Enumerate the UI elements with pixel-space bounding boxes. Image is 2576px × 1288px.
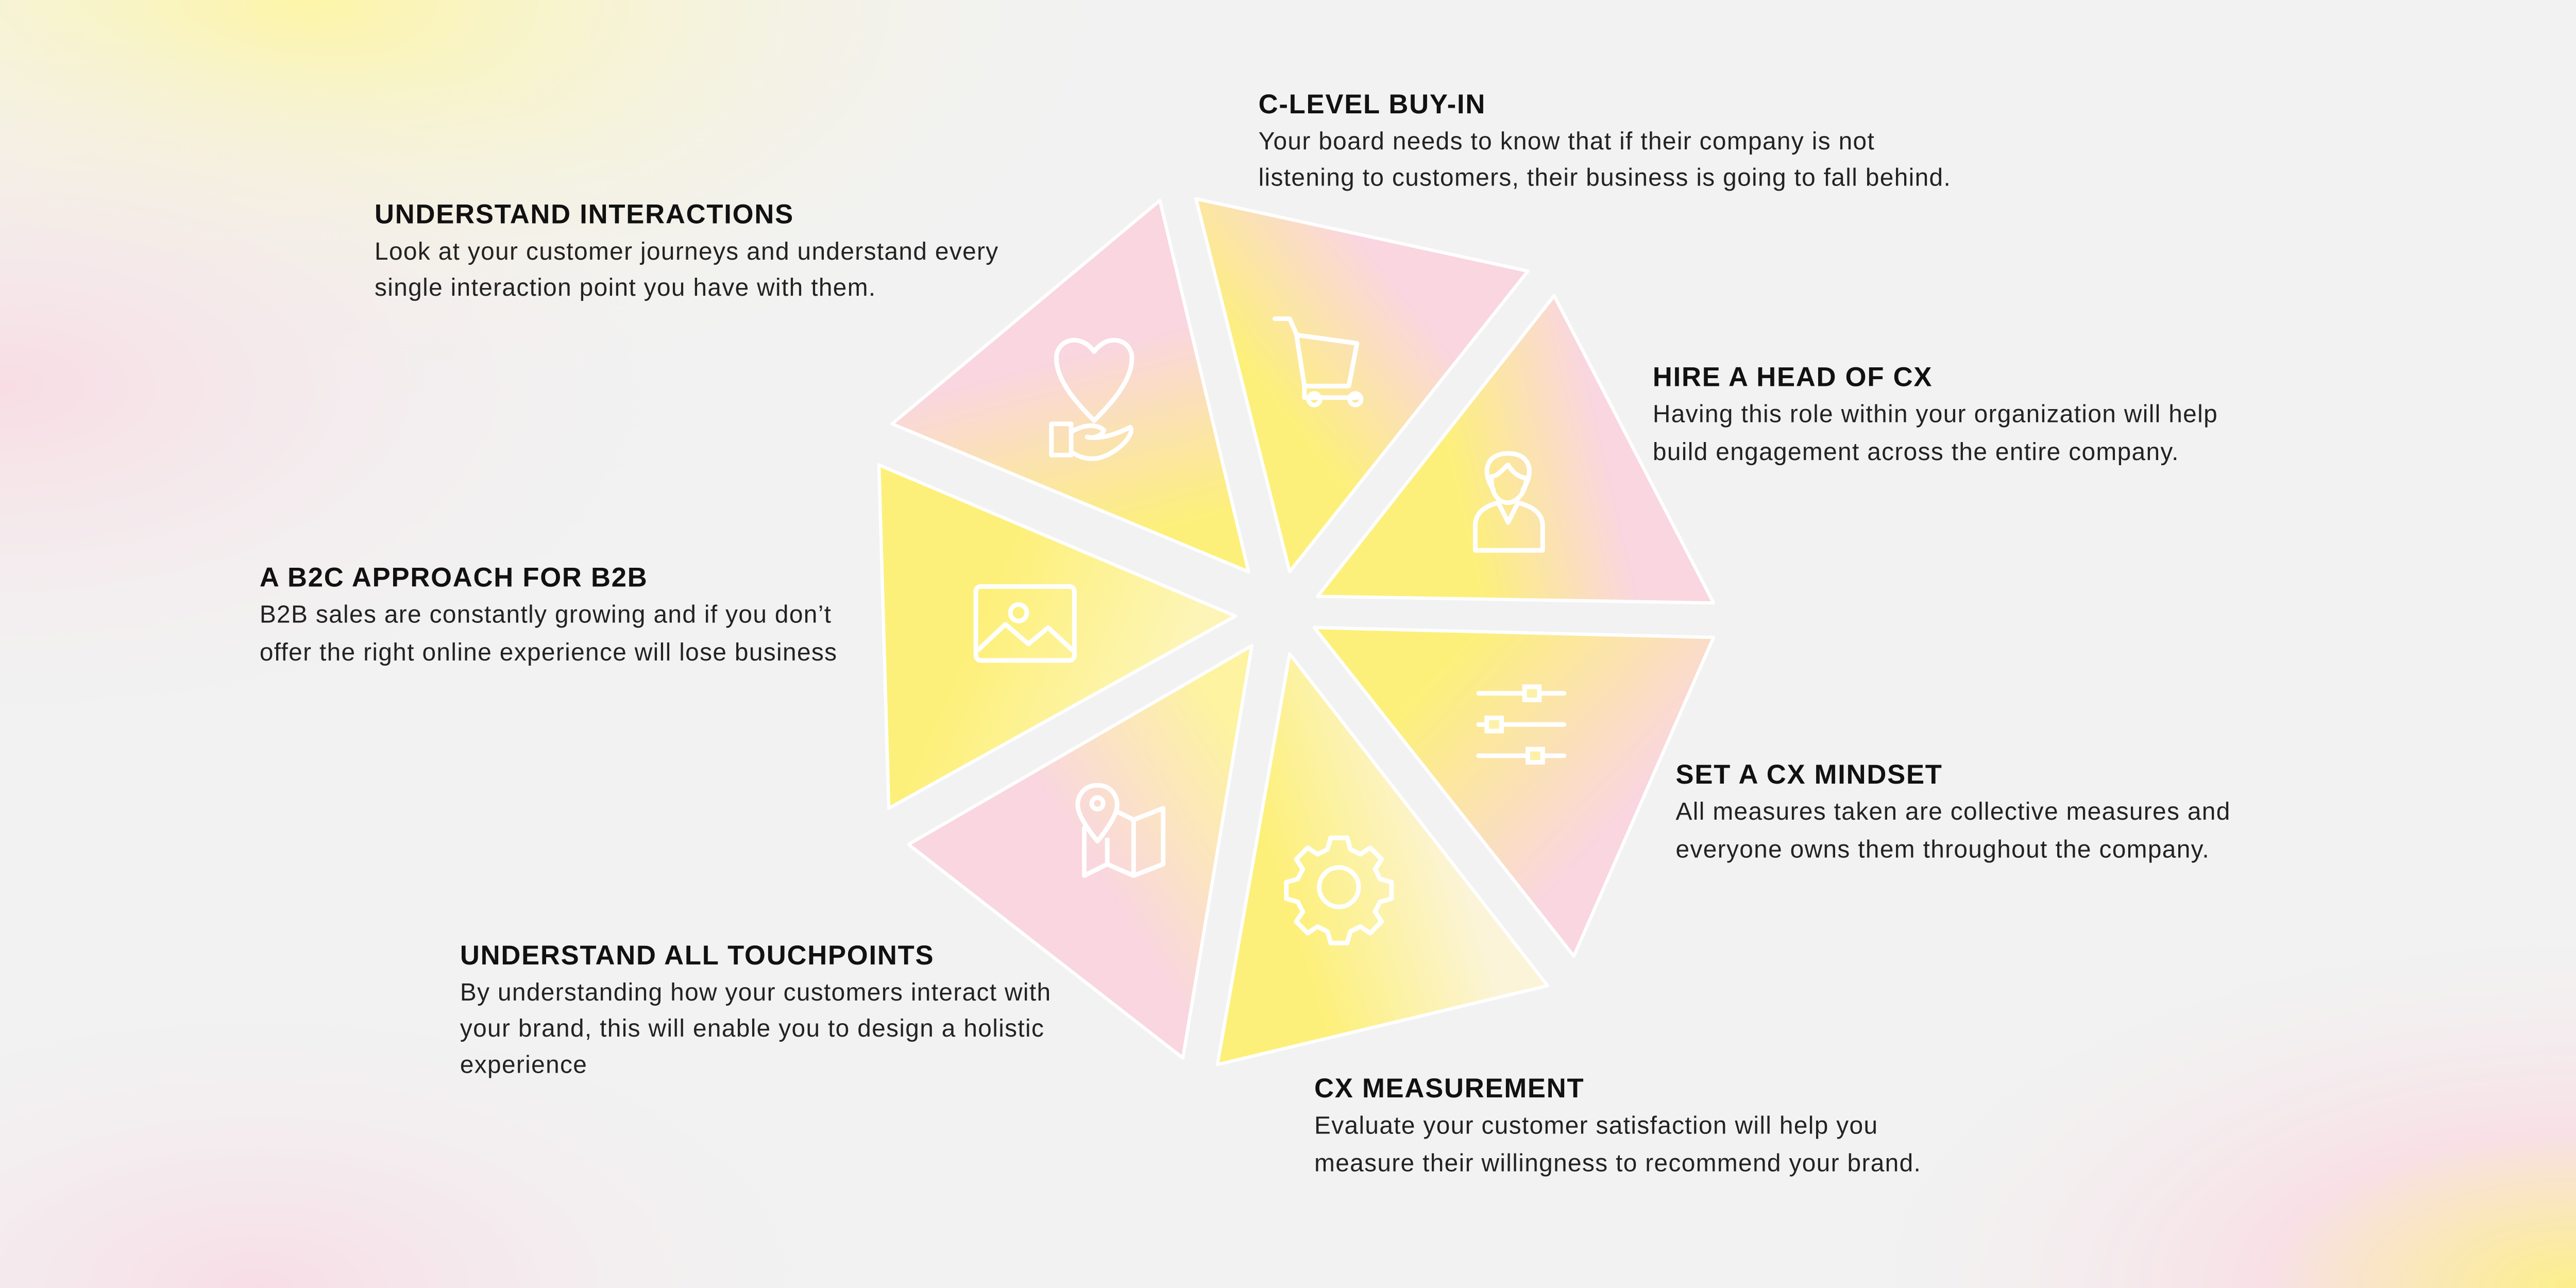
- text: cx measurement: measure their willingness to recommend your brand.: [1314, 1150, 1921, 1177]
- text: understand interactions: UNDERSTAND INTERACTIONS: [375, 199, 794, 230]
- text: c-level buy-in: listening to customers, their business is going to fall behind.: [1259, 164, 1951, 191]
- icon: cart: [1275, 319, 1361, 405]
- text: c-level buy-in: Your board needs to know that if their company is not: [1259, 128, 1875, 155]
- text: understand all touchpoints: experience: [460, 1051, 587, 1078]
- text: cx measurement: CX MEASUREMENT: [1314, 1073, 1584, 1104]
- text: understand interactions: [375, 199, 999, 301]
- text: understand all touchpoints: your brand, this will enable you to design a holistic: [460, 1015, 1044, 1042]
- segment: touchpoints: [908, 646, 1252, 1058]
- icon: heart in hand: [1052, 340, 1132, 459]
- icon: map pin: [1078, 785, 1163, 876]
- text: understand interactions: single interaction point you have with them.: [375, 274, 876, 301]
- text: hire a head of cx: [1653, 362, 2218, 466]
- text: set a cx mindset: All measures taken are collective measures and: [1676, 798, 2231, 825]
- segment: cx mindset: [1314, 628, 1714, 956]
- text: b2c approach: [260, 562, 837, 666]
- text: cx measurement: [1314, 1073, 1921, 1177]
- text: understand interactions: Look at your customer journeys and understand every: [375, 238, 999, 265]
- text: b2c approach: offer the right online experience will lose business: [260, 639, 837, 666]
- text: c-level buy-in: C-LEVEL BUY-IN: [1259, 89, 1486, 120]
- wheel diagram: [879, 199, 1714, 1064]
- segment: b2c approach: [879, 465, 1235, 808]
- text: set a cx mindset: everyone owns them throughout the company.: [1676, 836, 2210, 863]
- text: understand all touchpoints: By understanding how your customers interact with: [460, 979, 1051, 1006]
- text: set a cx mindset: [1676, 759, 2231, 863]
- segment: hire head of cx: [1317, 296, 1714, 603]
- icon: sliders: [1479, 687, 1564, 762]
- icon: person: [1476, 453, 1543, 550]
- segment: c-level buy-in: [1196, 199, 1528, 572]
- icon: gear: [1286, 838, 1392, 943]
- text: understand all touchpoints: UNDERSTAND ALL TOUCHPOINTS: [460, 940, 934, 971]
- text: hire a head of cx: HIRE A HEAD OF CX: [1653, 362, 1933, 392]
- text: hire a head of cx: Having this role within your organization will help: [1653, 401, 2218, 428]
- text: c-level buy-in: [1259, 89, 1951, 191]
- text: cx measurement: Evaluate your customer satisfaction will help you: [1314, 1112, 1878, 1139]
- text: hire a head of cx: build engagement across the entire company.: [1653, 438, 2179, 466]
- text: b2c approach: A B2C APPROACH FOR B2B: [260, 562, 648, 592]
- segment: understand interactions: [892, 200, 1248, 572]
- text: set a cx mindset: SET A CX MINDSET: [1676, 759, 1943, 790]
- segment: cx measurement: [1217, 654, 1548, 1064]
- icon: image: [976, 586, 1074, 660]
- text: b2c approach: B2B sales are constantly growing and if you don’t: [260, 601, 832, 629]
- text: understand all touchpoints: [460, 940, 1051, 1078]
